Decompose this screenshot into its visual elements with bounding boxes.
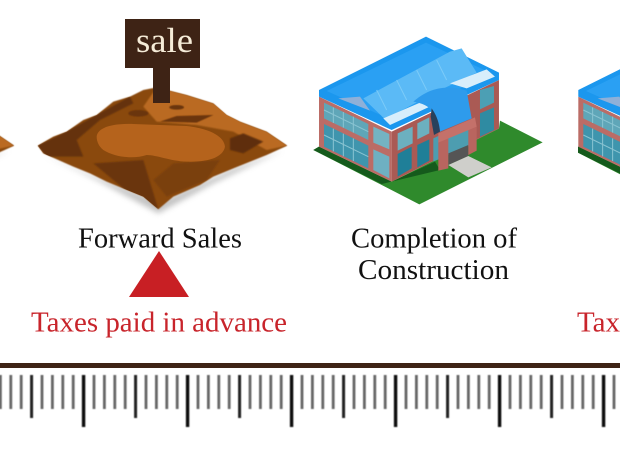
sign post bbox=[153, 67, 170, 103]
icon: completed building bbox=[313, 37, 543, 204]
icon: partial land plot at left edge bbox=[0, 135, 14, 154]
label: Completion of Construction: Construction bbox=[358, 255, 509, 286]
label: Completion of Construction: Completion of bbox=[351, 224, 518, 254]
red triangle marker bbox=[129, 251, 189, 297]
icon: partial building at right edge bbox=[578, 69, 620, 174]
timeline bar bbox=[0, 363, 620, 368]
label: Completion of Construction bbox=[351, 224, 518, 286]
timeline ruler ticks bbox=[0, 375, 614, 427]
sale sign: sale bbox=[136, 21, 193, 60]
sale sign bbox=[125, 19, 200, 68]
label: Taxes paid in advance: Taxes paid in advance bbox=[31, 308, 287, 338]
label: Forward Sales: Forward Sales bbox=[78, 224, 242, 254]
icon: land plot for sale bbox=[38, 19, 287, 213]
